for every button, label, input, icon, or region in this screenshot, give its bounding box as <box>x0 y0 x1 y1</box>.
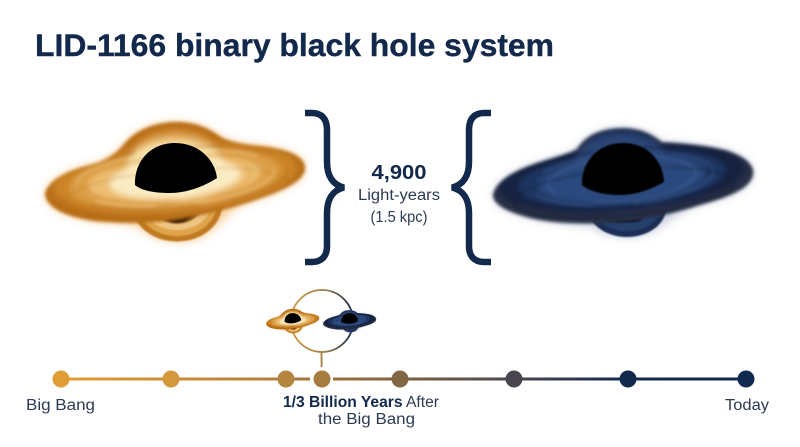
label: 1/3 billion years after the Big Bang <box>283 394 439 428</box>
label: 1/3 billion years after the Big Bang: 1/3 Billion Years After <box>283 394 439 411</box>
distance label: (1.5 kpc) <box>370 209 428 226</box>
title: LID-1166 binary black hole system <box>35 27 554 63</box>
timeline dots <box>52 370 754 388</box>
timeline <box>52 370 754 388</box>
accretion disc <box>480 115 770 240</box>
label: Today: Today <box>725 397 769 414</box>
distance label <box>358 162 440 226</box>
lower lensed ring <box>588 179 666 237</box>
disc streaks <box>59 138 292 226</box>
distance label: Light-years <box>358 187 440 204</box>
icon: small orange black hole <box>263 306 322 333</box>
icon: blue black hole <box>480 115 770 240</box>
left-facing brace <box>452 113 491 262</box>
right-facing brace <box>305 113 344 262</box>
lower lensed ring <box>132 168 222 242</box>
blue outer glow <box>493 128 753 237</box>
distance label: 4,900 <box>372 162 426 184</box>
icon: small blue black hole <box>320 307 380 333</box>
accretion disc <box>30 110 320 235</box>
timeline line <box>61 378 746 380</box>
black hole shadow <box>135 143 217 193</box>
label: Big Bang: Big Bang <box>26 397 95 414</box>
icon: orange black hole <box>30 110 320 242</box>
disc streaks <box>510 140 735 226</box>
black hole shadow <box>582 143 664 195</box>
inset orbit with connector <box>291 290 353 367</box>
label: 1/3 billion years after the Big Bang: the Big Bang <box>318 411 415 428</box>
orange outer glow <box>45 122 305 242</box>
